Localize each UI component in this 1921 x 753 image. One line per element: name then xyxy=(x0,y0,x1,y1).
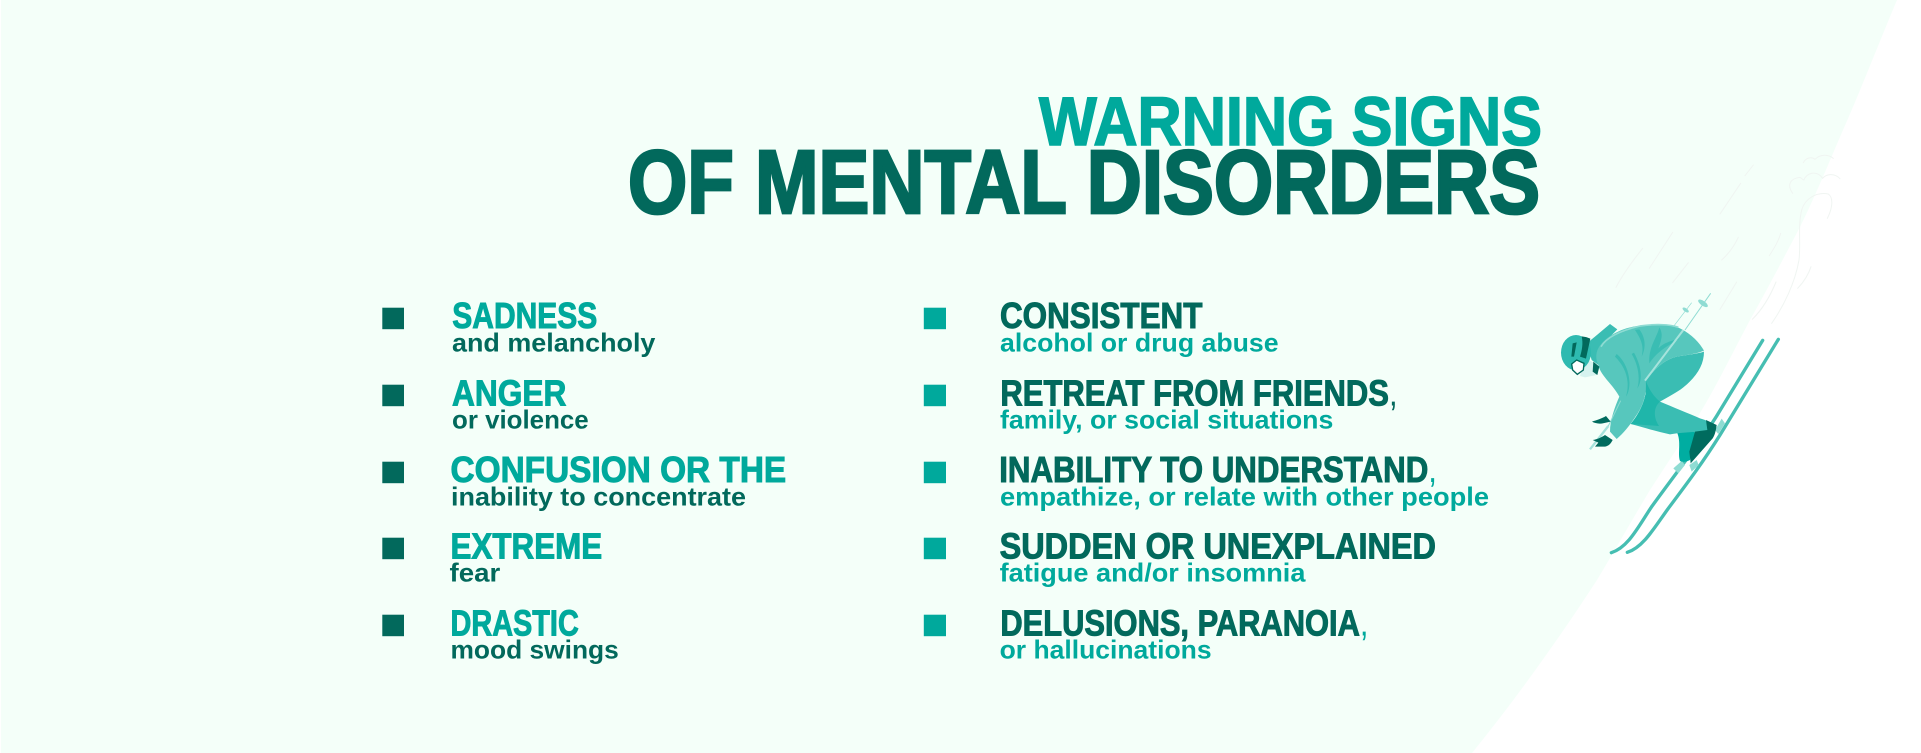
item: drastic mood swings xyxy=(382,602,619,664)
item: anger xyxy=(382,373,589,434)
item: retreat from friends xyxy=(924,373,1398,434)
jacket folds xyxy=(1615,327,1680,397)
item: delusions xyxy=(924,602,1369,664)
item: confusion: CONFUSION OR THE xyxy=(450,449,786,490)
title line 2: OF MENTAL DISORDERS xyxy=(628,133,1540,233)
hood xyxy=(1587,324,1617,365)
item: extreme fear: EXTREME xyxy=(450,525,602,566)
left column list xyxy=(382,295,786,664)
item: sadness xyxy=(382,295,656,357)
speed lines and snow spray xyxy=(1616,155,1840,323)
item: confusion xyxy=(382,449,786,511)
item: delusions: or hallucinations xyxy=(1000,634,1212,664)
icon: skier illustration xyxy=(1561,155,1840,553)
rear leg xyxy=(1677,432,1695,462)
item: retreat from friends: RETREAT FROM FRIENDS, xyxy=(1000,373,1398,414)
skis xyxy=(1611,339,1778,553)
item: delusions: DELUSIONS, PARANOIA, xyxy=(1000,602,1369,643)
item: consistent abuse: CONSISTENT xyxy=(1000,295,1202,336)
leg shading xyxy=(1631,381,1660,426)
title xyxy=(628,83,1542,233)
item: sudden fatigue xyxy=(924,525,1436,588)
item: confusion: inability to concentrate xyxy=(451,481,746,511)
item: anger: ANGER xyxy=(452,373,566,414)
jacket xyxy=(1596,325,1704,439)
item: consistent abuse: alcohol or drug abuse xyxy=(1000,327,1279,357)
gloves xyxy=(1592,416,1613,447)
item: extreme fear: fear xyxy=(450,558,500,588)
item: inability to understand: INABILITY TO UNDERSTAND, xyxy=(999,449,1437,490)
item: sadness: and melancholy xyxy=(452,327,656,357)
legs xyxy=(1631,352,1715,434)
right column list xyxy=(924,295,1489,664)
poles behind skier xyxy=(1673,293,1711,330)
item: inability to understand xyxy=(924,449,1489,511)
title line 1: WARNING SIGNS xyxy=(1039,83,1542,160)
head and helmet xyxy=(1561,335,1599,377)
item: drastic mood swings: DRASTIC xyxy=(450,602,579,643)
item: sadness: SADNESS xyxy=(452,295,597,336)
item: retreat from friends: family, or social situations xyxy=(1000,404,1333,434)
item: drastic mood swings: mood swings xyxy=(450,634,619,664)
boots xyxy=(1689,420,1717,463)
item: sudden fatigue: fatigue and/or insomnia xyxy=(1000,558,1306,588)
item: anger: or violence xyxy=(452,404,589,434)
item: consistent abuse xyxy=(924,295,1279,357)
item: inability to understand: empathize, or relate with other people xyxy=(1000,481,1489,511)
item: extreme fear xyxy=(382,525,602,588)
ski bindings xyxy=(1673,419,1725,473)
item: sudden fatigue: SUDDEN OR UNEXPLAINED xyxy=(1000,525,1436,566)
front pole xyxy=(1590,330,1683,449)
jacket top rim highlight xyxy=(1601,325,1678,347)
